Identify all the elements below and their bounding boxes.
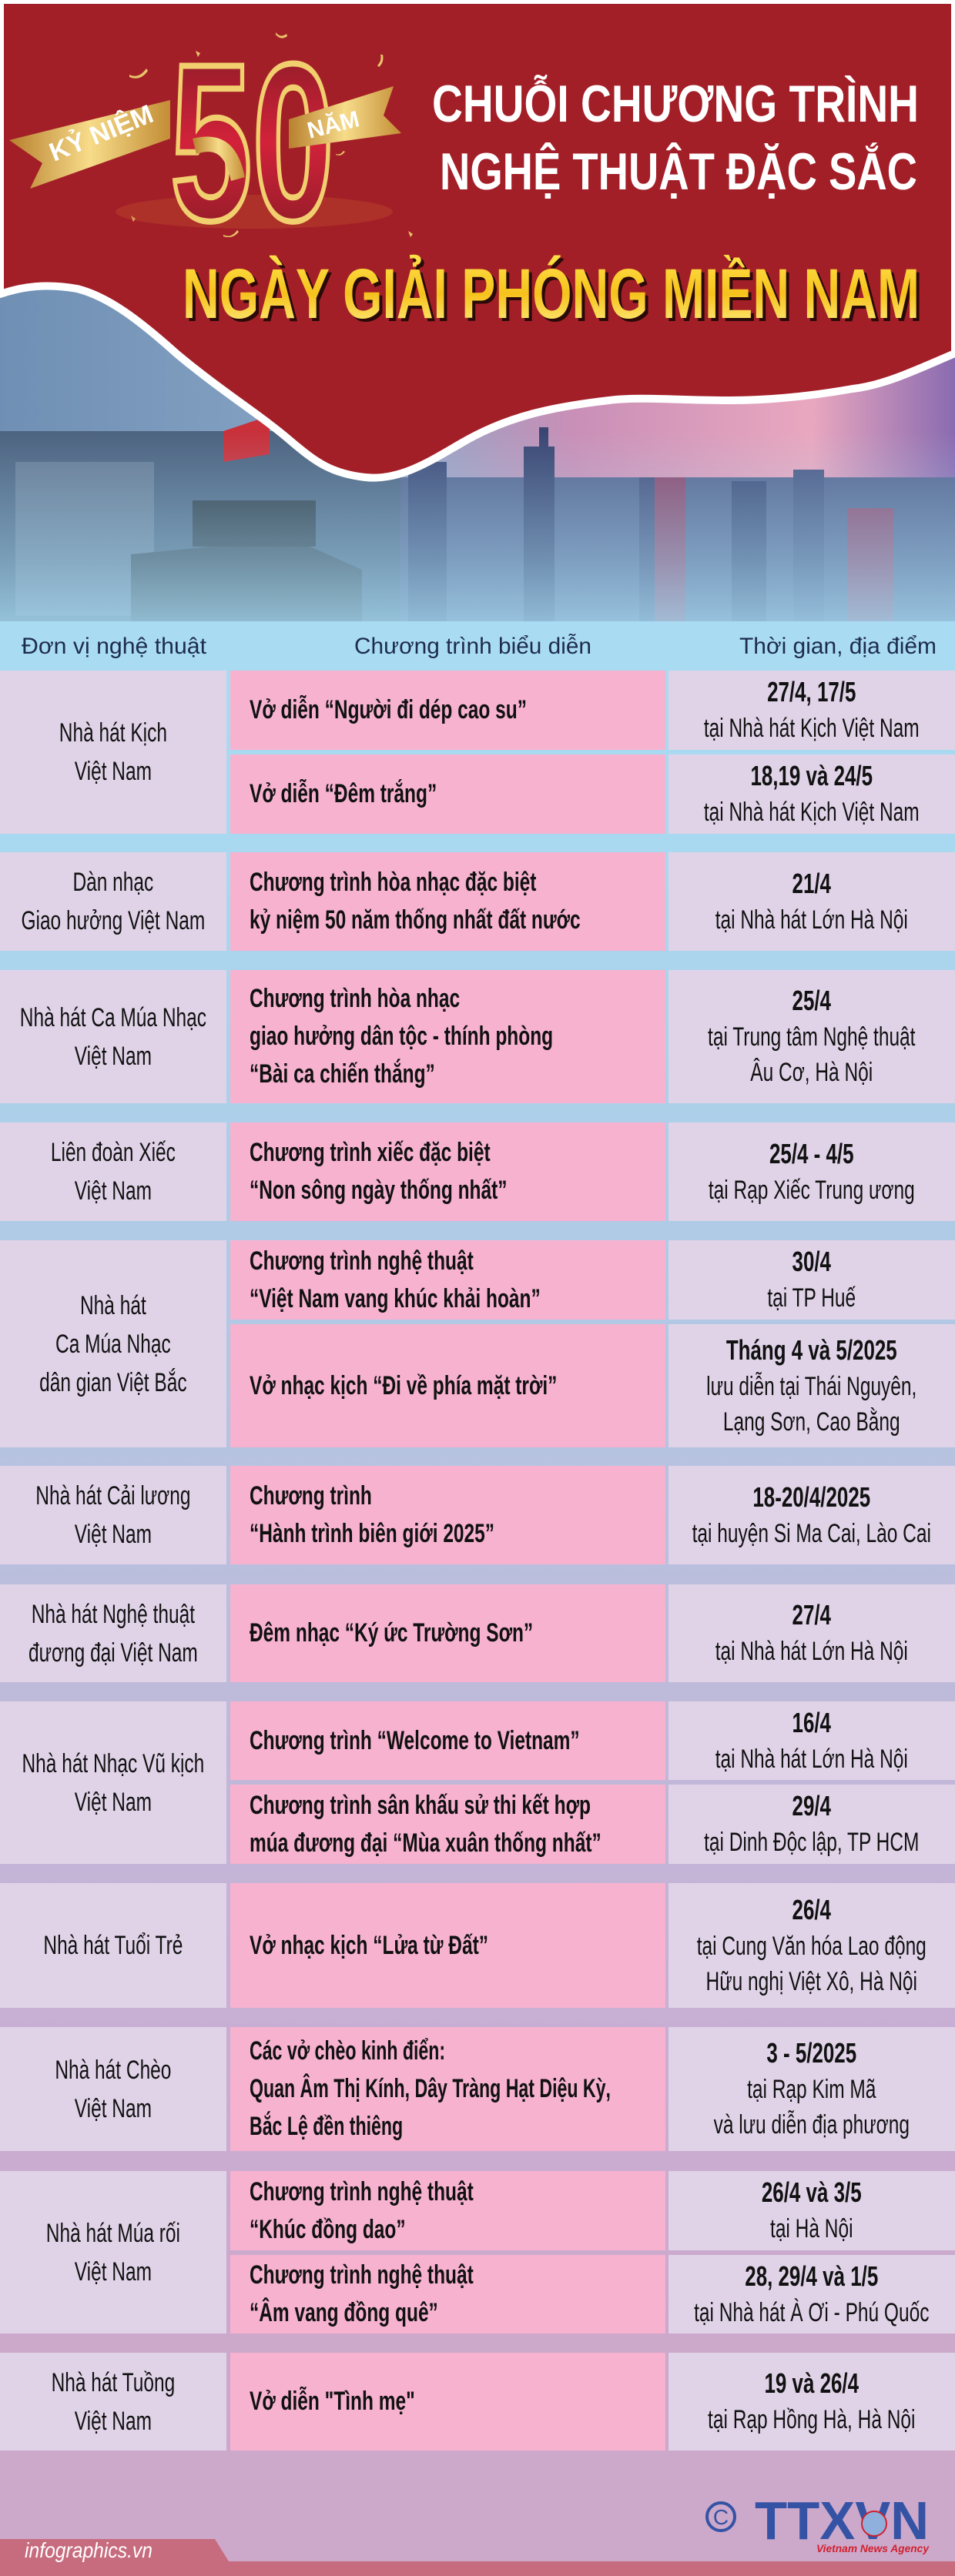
text: Nhà hát Nhạc Vũ kịch	[22, 1749, 204, 1778]
text: dân gian Việt Bắc	[39, 1367, 187, 1397]
text: Chương trình nghệ thuật	[250, 2260, 474, 2290]
text: Việt Nam	[75, 2257, 152, 2287]
row: Tuồng	[0, 2353, 955, 2451]
text: tại Trung tâm Nghệ thuật	[708, 1022, 915, 1052]
logo: TTXVN: C	[713, 2505, 729, 2529]
text: Vở nhạc kịch “Lửa từ Đất”	[250, 1931, 488, 1960]
row: Ca Múa Nhạc Việt Nam	[0, 970, 955, 1103]
text: Việt Nam	[75, 2407, 152, 2436]
text: Chương trình hòa nhạc đặc biệt	[250, 868, 536, 897]
text: Liên đoàn Xiếc	[51, 1138, 176, 1167]
logo: 50 years ribbon: KỶ NIỆM	[45, 99, 157, 167]
confetti	[129, 32, 413, 237]
text: 25/4 - 4/5	[769, 1138, 854, 1169]
text: Việt Nam	[75, 1520, 152, 1549]
text: Nhà hát Cải lương	[35, 1481, 190, 1510]
text: Dàn nhạc	[72, 868, 153, 897]
text: kỷ niệm 50 năm thống nhất đất nước	[250, 905, 581, 935]
text: Vở diễn “Đêm trắng”	[250, 779, 437, 808]
text: Chương trình	[250, 1481, 372, 1510]
text: tại Nhà hát Lớn Hà Nội	[715, 905, 908, 935]
title	[183, 74, 923, 336]
text: Lạng Sơn, Cao Bằng	[723, 1407, 900, 1437]
text: đương đại Việt Nam	[28, 1638, 198, 1668]
text: Chương trình xiếc đặc biệt	[250, 1138, 491, 1167]
text: Vở nhạc kịch “Đi về phía mặt trời”	[250, 1370, 557, 1400]
text: 29/4	[792, 1790, 831, 1822]
logo: TTXVN: Vietnam News Agency	[816, 2542, 930, 2554]
text: “Bài ca chiến thắng”	[250, 1059, 435, 1089]
text: Nhà hát Ca Múa Nhạc	[20, 1002, 206, 1032]
footer	[0, 2491, 955, 2576]
row: Dàn nhạc Giao hưởng	[0, 852, 955, 951]
text: “Việt Nam vang khúc khải hoàn”	[250, 1284, 541, 1313]
text: 19 và 26/4	[765, 2367, 859, 2399]
column headers: Chương trình biểu diễn	[354, 634, 591, 659]
text: tại Nhà hát Lớn Hà Nội	[715, 1745, 908, 1774]
text: “Khúc đồng dao”	[250, 2214, 406, 2243]
column headers: Thời gian, địa điểm	[739, 634, 937, 659]
text: Nhà hát Tuổi Trẻ	[43, 1931, 183, 1960]
text: 25/4	[792, 985, 831, 1016]
text: 18-20/4/2025	[752, 1481, 870, 1512]
header artwork	[0, 0, 955, 659]
text: Bắc Lệ đền thiêng	[250, 2112, 403, 2141]
text: Chương trình “Welcome to Vietnam”	[250, 1726, 580, 1755]
text: Nhà hát Chèo	[55, 2056, 171, 2085]
column headers: Đơn vị nghệ thuật	[22, 634, 207, 659]
text: Đêm nhạc “Ký ức Trường Sơn”	[250, 1618, 533, 1648]
text: múa đương đại “Mùa xuân thống nhất”	[250, 1828, 601, 1857]
text: Ca Múa Nhạc	[55, 1329, 171, 1358]
text: lưu diễn tại Thái Nguyên,	[706, 1372, 916, 1401]
text: tại Nhà hát À Ơi - Phú Quốc	[694, 2297, 929, 2327]
text: 26/4 và 3/5	[762, 2176, 862, 2208]
source: infographics.vn: infographics.vn	[25, 2538, 152, 2562]
text: Nhà hát Nghệ thuật	[32, 1600, 195, 1629]
text: Việt Nam	[75, 1041, 152, 1070]
text: “Non sông ngày thống nhất”	[250, 1176, 508, 1205]
text: và lưu diễn địa phương	[714, 2110, 910, 2139]
text: tại Nhà hát Kịch Việt Nam	[704, 798, 920, 827]
text: Hữu nghị Việt Xô, Hà Nội	[706, 1966, 917, 1996]
text: Việt Nam	[75, 1788, 152, 1817]
text: Nhà hát Múa rối	[46, 2219, 180, 2248]
text: Việt Nam	[75, 1176, 152, 1206]
logo: TTXVN: TTXVN	[755, 2491, 929, 2551]
text: Âu Cơ, Hà Nội	[750, 1058, 873, 1087]
logo: 50 years ribbon: NĂM	[304, 105, 362, 144]
text: 26/4	[792, 1894, 831, 1925]
text: 16/4	[792, 1706, 831, 1738]
text: tại huyện Si Ma Cai, Lào Cai	[692, 1518, 931, 1547]
text: “Âm vang đồng quê”	[250, 2298, 438, 2327]
footer band	[0, 2539, 955, 2576]
text: tại Rạp Hồng Hà, Hà Nội	[708, 2405, 915, 2434]
text: tại Rạp Xiếc Trung ương	[709, 1175, 915, 1204]
row: Múa rối	[0, 2171, 955, 2333]
text: tại TP Huế	[767, 1283, 856, 1313]
text: tại Cung Văn hóa Lao động	[697, 1931, 927, 1960]
logo: 50 years ribbon	[9, 18, 401, 267]
text: Vở diễn “Người đi dép cao su”	[250, 695, 527, 724]
row: Việt Bắc	[0, 1240, 955, 1447]
text: Việt Nam	[75, 757, 152, 786]
text: tại Nhà hát Lớn Hà Nội	[715, 1637, 908, 1666]
text: Nhà hát Kịch	[59, 718, 167, 748]
text: 21/4	[792, 867, 831, 899]
text: giao hưởng dân tộc - thính phòng	[250, 1022, 553, 1051]
row: Nhà hát Kịch	[0, 671, 955, 834]
text: Vở diễn "Tình mẹ"	[250, 2387, 415, 2416]
text: tại Hà Nội	[770, 2214, 853, 2243]
text: Chương trình nghệ thuật	[250, 2177, 474, 2206]
text: 27/4	[792, 1599, 831, 1631]
red wave background	[0, 0, 955, 478]
text: Chương trình hòa nhạc	[250, 984, 460, 1013]
row: Tuổi Trẻ	[0, 1883, 955, 2008]
text: 18,19 và 24/5	[750, 760, 873, 791]
row: Nhạc Vũ kịch	[0, 1701, 955, 1864]
text: 27/4, 17/5	[767, 676, 856, 708]
row: Nghệ thuật đương đại	[0, 1584, 955, 1682]
text: 28, 29/4 và 1/5	[745, 2260, 878, 2291]
text: 3 - 5/2025	[766, 2037, 856, 2069]
text: Tháng 4 và 5/2025	[726, 1333, 897, 1366]
text: Giao hưởng Việt Nam	[21, 906, 205, 935]
text: Các vở chèo kinh điển:	[250, 2036, 445, 2066]
text: Nhà hát Tuồng	[52, 2368, 175, 2397]
text: 30/4	[792, 1246, 831, 1277]
text: “Hành trình biên giới 2025”	[250, 1519, 494, 1548]
row: Cải lương	[0, 1466, 955, 1564]
text: Quan Âm Thị Kính, Dây Tràng Hạt Diệu Kỳ,	[250, 2074, 611, 2103]
row: Liên đoàn Xiếc	[0, 1122, 955, 1221]
text: Việt Nam	[75, 2094, 152, 2123]
row: Chèo	[0, 2027, 955, 2151]
text: Nhà hát	[80, 1290, 146, 1320]
text: Chương trình nghệ thuật	[250, 1246, 474, 1275]
text: tại Dinh Độc lập, TP HCM	[704, 1828, 919, 1857]
text: tại Rạp Kim Mã	[747, 2075, 876, 2104]
photo: history and city	[0, 231, 955, 670]
text: Chương trình sân khấu sử thi kết hợp	[250, 1791, 591, 1820]
column headers	[0, 621, 955, 670]
logo: 50 years ribbon: 50	[170, 18, 334, 267]
text: tại Nhà hát Kịch Việt Nam	[704, 714, 920, 743]
